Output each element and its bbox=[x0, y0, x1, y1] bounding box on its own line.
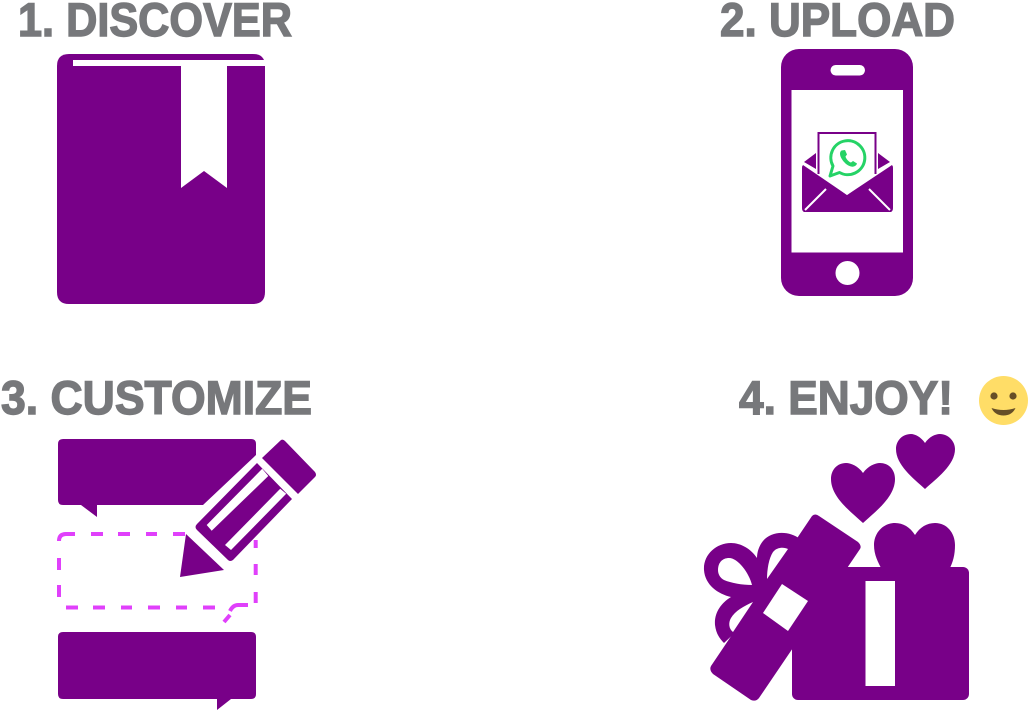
speech bubble: top bbox=[58, 439, 256, 517]
heart: right bbox=[896, 434, 955, 489]
speech bubble: dashed middle bbox=[59, 534, 256, 622]
icon: book with bookmark bbox=[57, 54, 265, 304]
heading: 4. Enjoy!: 4. ENJOY! bbox=[739, 371, 953, 424]
gift bow bbox=[704, 533, 800, 643]
icon: smiley emoji bbox=[979, 376, 1028, 425]
icon: gift box with hearts bbox=[704, 434, 969, 701]
icon: speech bubbles with pencil bbox=[58, 439, 316, 710]
icon: pencil bbox=[180, 440, 316, 577]
icon: WhatsApp logo bbox=[830, 141, 865, 176]
icon: phone with envelope and WhatsApp bbox=[781, 49, 913, 296]
gift box bbox=[792, 567, 969, 700]
speech bubble: bottom bbox=[58, 632, 256, 710]
gift lid bbox=[710, 514, 861, 701]
heading: 3. Customize: 3. CUSTOMIZE bbox=[1, 371, 312, 424]
heart: in box bbox=[874, 523, 955, 570]
heart: left bbox=[831, 463, 895, 523]
icon: open envelope bbox=[802, 133, 893, 212]
